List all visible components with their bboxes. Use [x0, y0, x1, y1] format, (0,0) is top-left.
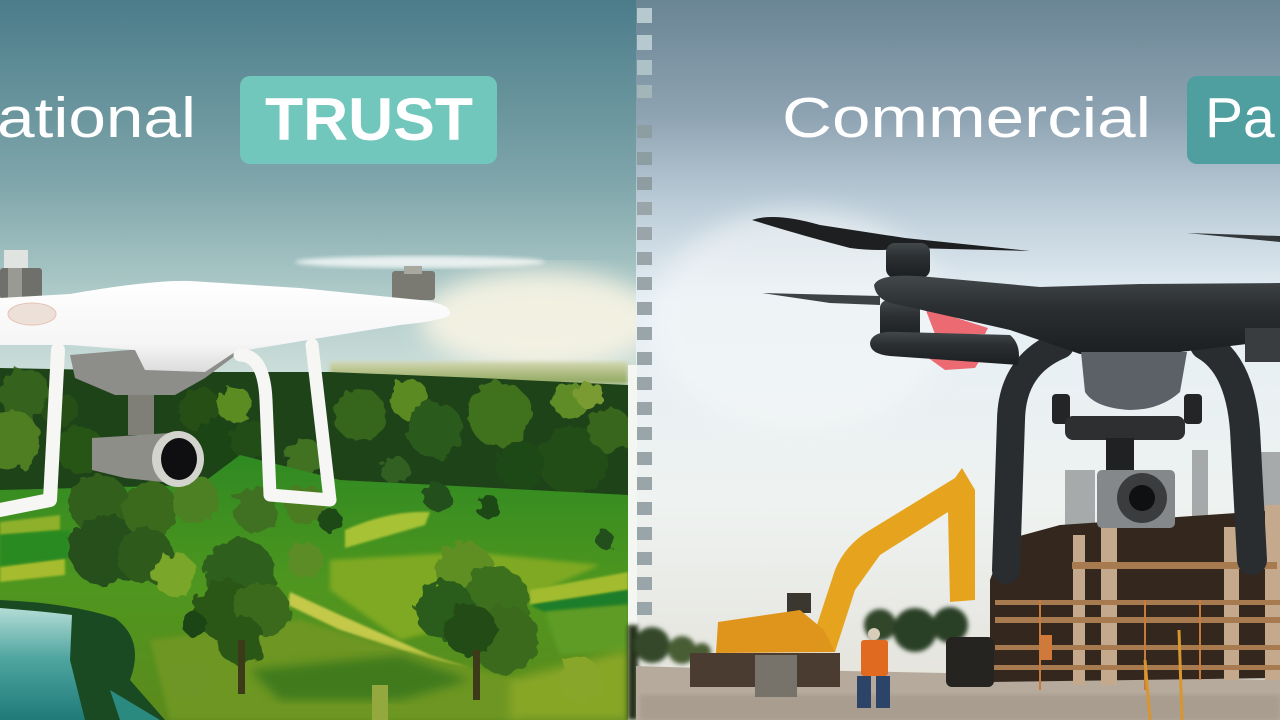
panel: recreational landscape — [0, 0, 660, 720]
panel: commercial construction site — [628, 0, 1280, 720]
badge: trust: TRUST — [265, 86, 473, 153]
white drone — [0, 250, 450, 510]
heading: recreational: ational — [0, 86, 196, 150]
propellers — [752, 217, 1280, 305]
battery unit — [1081, 352, 1187, 410]
building scaffold — [990, 505, 1280, 720]
landing gear — [0, 345, 330, 510]
distant city towers — [1065, 450, 1280, 530]
black drone — [752, 217, 1280, 570]
heading: commercial: Commercial — [782, 86, 1151, 150]
distant trees — [628, 607, 968, 720]
drone arms and body — [870, 243, 1280, 365]
badge: partial word: Pa — [1205, 86, 1275, 150]
badge: partial word — [1187, 76, 1280, 164]
ground — [636, 666, 1280, 720]
foreground trees — [69, 475, 614, 720]
meadow — [0, 455, 628, 720]
white seam beside the landscape — [628, 365, 637, 625]
drone body — [0, 281, 450, 372]
divider: dashed vertical line — [637, 8, 652, 615]
landing legs — [1006, 345, 1252, 570]
camera gimbal — [92, 395, 204, 487]
excavator — [690, 468, 994, 697]
red underside — [920, 308, 988, 370]
badge: trust — [240, 76, 497, 164]
forest treeline — [0, 362, 632, 510]
gimbal camera — [1052, 394, 1202, 528]
worker — [857, 628, 890, 708]
motors — [0, 250, 435, 300]
drone underside gimbal mount — [70, 350, 240, 395]
pond — [0, 600, 165, 720]
